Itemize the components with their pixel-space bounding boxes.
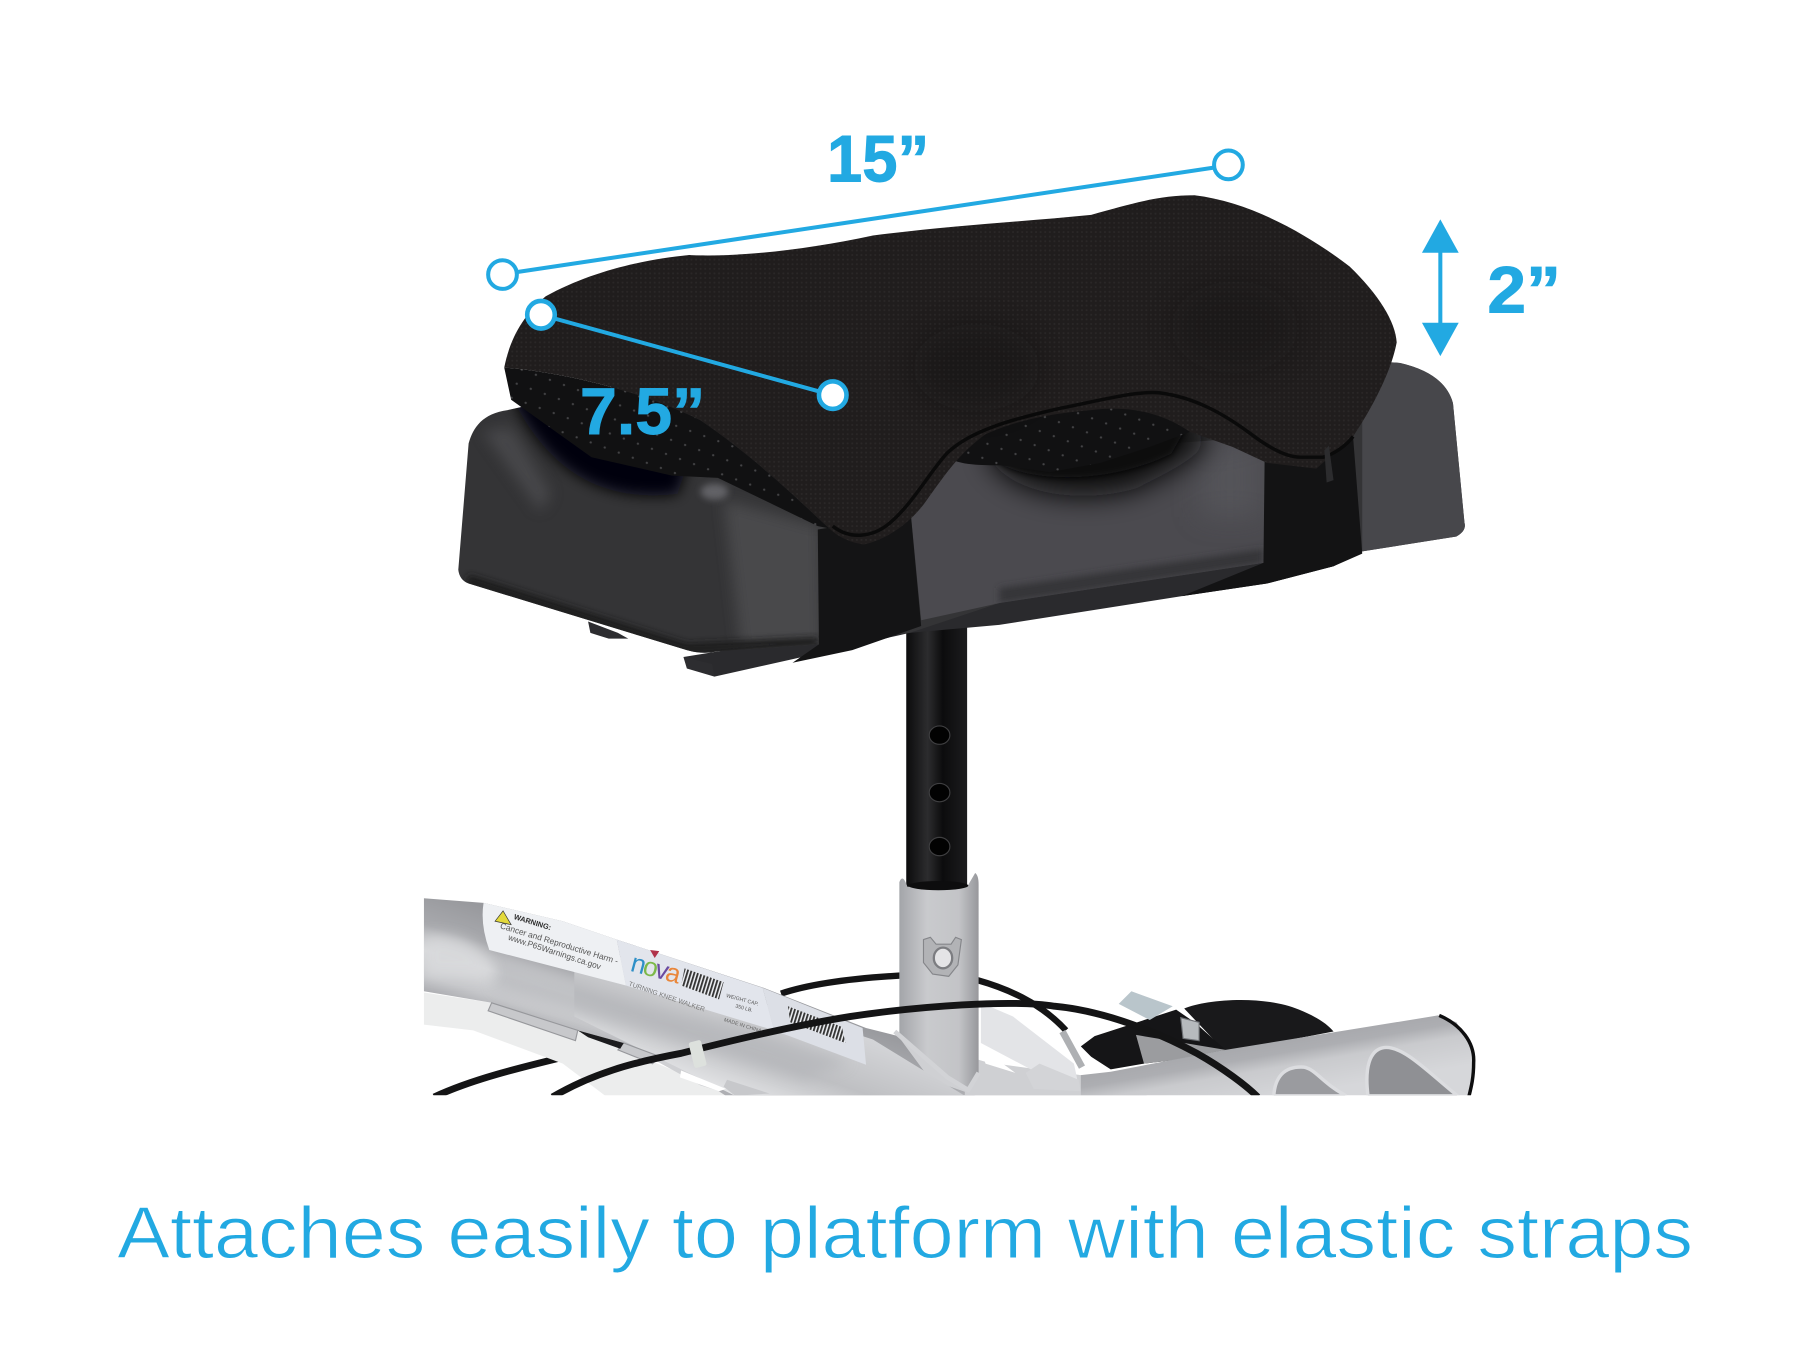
- zipper seam: [833, 393, 1353, 535]
- scooter frame tube: [424, 898, 1149, 1096]
- infographic canvas: [118, 136, 1690, 1272]
- warning label: www.P65Warnings.ca.gov: [506, 932, 603, 972]
- dimension: length 15 inches: 15”: [827, 123, 929, 196]
- warning label: Cancer and Reproductive Harm -: [499, 920, 620, 966]
- warning label: WARNING:: [513, 912, 552, 932]
- dimension: height 2 inches: 2”: [1487, 253, 1561, 326]
- cable tie: [688, 1040, 707, 1068]
- nova product label: [617, 940, 774, 1035]
- lower plate: [424, 992, 725, 1096]
- dimension: length 15 inches: [488, 123, 1243, 289]
- serial number label: [763, 988, 866, 1065]
- nova product label: WEIGHT CAP.: [725, 993, 759, 1008]
- tube welds: [1274, 1047, 1458, 1096]
- saddle shadows: [509, 407, 690, 502]
- dimension: width 7.5 inches: [527, 301, 847, 448]
- cushion fabric top: [504, 195, 1397, 544]
- elastic straps: [793, 437, 1362, 663]
- warning label: [483, 903, 626, 986]
- lower cables behind frame: [434, 975, 1082, 1097]
- right end: [1362, 356, 1470, 554]
- gel cushion: [504, 195, 1397, 544]
- nova product label: MADE IN CHINA: [723, 1017, 763, 1035]
- center lighter panel: [911, 437, 1265, 620]
- photo: knee scooter with cushion: [424, 195, 1474, 1097]
- mesh underside middle: [948, 393, 1195, 472]
- seat post with adjustment holes: [906, 626, 967, 890]
- adjustment holes: [929, 726, 950, 856]
- silver sleeve and clamp: [895, 873, 979, 1090]
- wheel and brake bracket: [1081, 991, 1334, 1069]
- nova product label: TURNING KNEE WALKER: [628, 981, 706, 1014]
- right cross tube: [1081, 1015, 1474, 1096]
- dimension: height 2 inches: [1422, 219, 1561, 356]
- cushion soft shadows: [913, 324, 1039, 411]
- tube end rim: [1439, 1015, 1474, 1096]
- nova product label: 350 LB.: [735, 1004, 753, 1014]
- frame welds: [488, 1003, 578, 1041]
- caption: Attaches easily to platform with elastic straps: [117, 1191, 1693, 1274]
- front corner: [724, 500, 822, 650]
- main black cable: [552, 1003, 1258, 1097]
- gusset plate: [981, 1007, 1077, 1079]
- bottom body: [658, 1040, 1146, 1096]
- upper tube: [424, 898, 976, 1096]
- pad underside plate and feet: [588, 551, 1362, 677]
- nova product label: nova: [628, 947, 685, 990]
- knee platform pad: [458, 345, 1470, 655]
- dimension: width 7.5 inches: 7.5”: [580, 375, 705, 448]
- mesh underside left: [504, 368, 829, 528]
